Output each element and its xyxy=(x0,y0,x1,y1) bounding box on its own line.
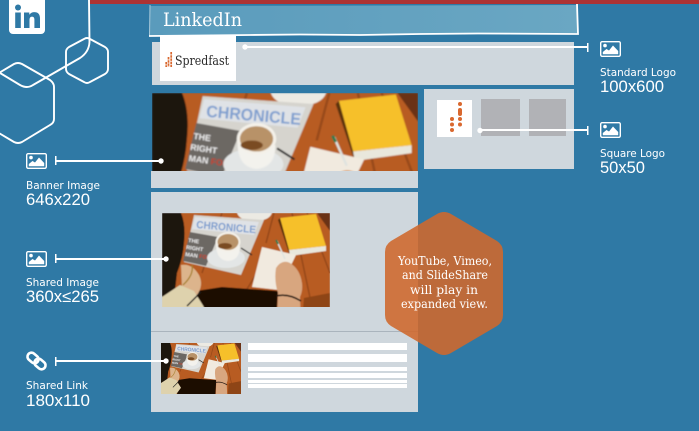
icon: chain link xyxy=(26,351,47,371)
connector: shared link xyxy=(55,357,169,366)
connector: square logo xyxy=(477,126,588,135)
panel: square logo xyxy=(424,89,574,169)
callout: video hexagon xyxy=(385,212,503,355)
panel: banner image xyxy=(151,93,418,267)
panel: standard logo row xyxy=(152,36,574,85)
label: shared link: Shared Link xyxy=(26,379,89,392)
shared link text placeholder lines xyxy=(248,343,407,388)
connector: shared image xyxy=(55,254,169,263)
Spredfast logo xyxy=(160,36,236,81)
label: standard logo xyxy=(600,42,676,96)
hexagon line decoration xyxy=(0,0,108,143)
top red bar xyxy=(90,0,699,4)
label: shared link xyxy=(26,351,90,410)
callout: video hexagon: YouTube, Vimeo, xyxy=(397,253,492,268)
shared link photo xyxy=(161,343,241,394)
callout: video hexagon: and SlideShare xyxy=(402,267,488,282)
callout: video hexagon: will play in xyxy=(410,282,478,297)
label: banner image xyxy=(26,154,100,209)
shared image photo xyxy=(162,213,330,307)
banner photo xyxy=(152,93,418,171)
panel: shared content xyxy=(151,192,418,412)
connector: banner image xyxy=(55,156,164,165)
label: square logo: Square Logo xyxy=(600,147,665,160)
label: shared image xyxy=(26,252,99,306)
label: banner image: 646x220 xyxy=(26,191,90,209)
label: square logo: 50x50 xyxy=(600,159,645,177)
label: square logo xyxy=(600,123,665,177)
label: shared image: 360x≤265 xyxy=(26,288,99,306)
label: banner image: Banner Image xyxy=(26,179,100,192)
title banner: LinkedIn xyxy=(149,4,578,36)
square logo xyxy=(437,100,472,137)
label: standard logo: Standard Logo xyxy=(600,66,676,79)
callout: video hexagon: expanded view. xyxy=(401,296,488,311)
label: standard logo: 100x600 xyxy=(600,78,664,96)
label: shared link: 180x110 xyxy=(26,392,90,410)
connector: standard logo xyxy=(242,43,589,52)
icon: LinkedIn logo xyxy=(9,0,45,34)
label: shared image: Shared Image xyxy=(26,276,99,289)
Spredfast logo: Spredfast xyxy=(175,54,230,69)
title text: LinkedIn xyxy=(163,9,242,31)
